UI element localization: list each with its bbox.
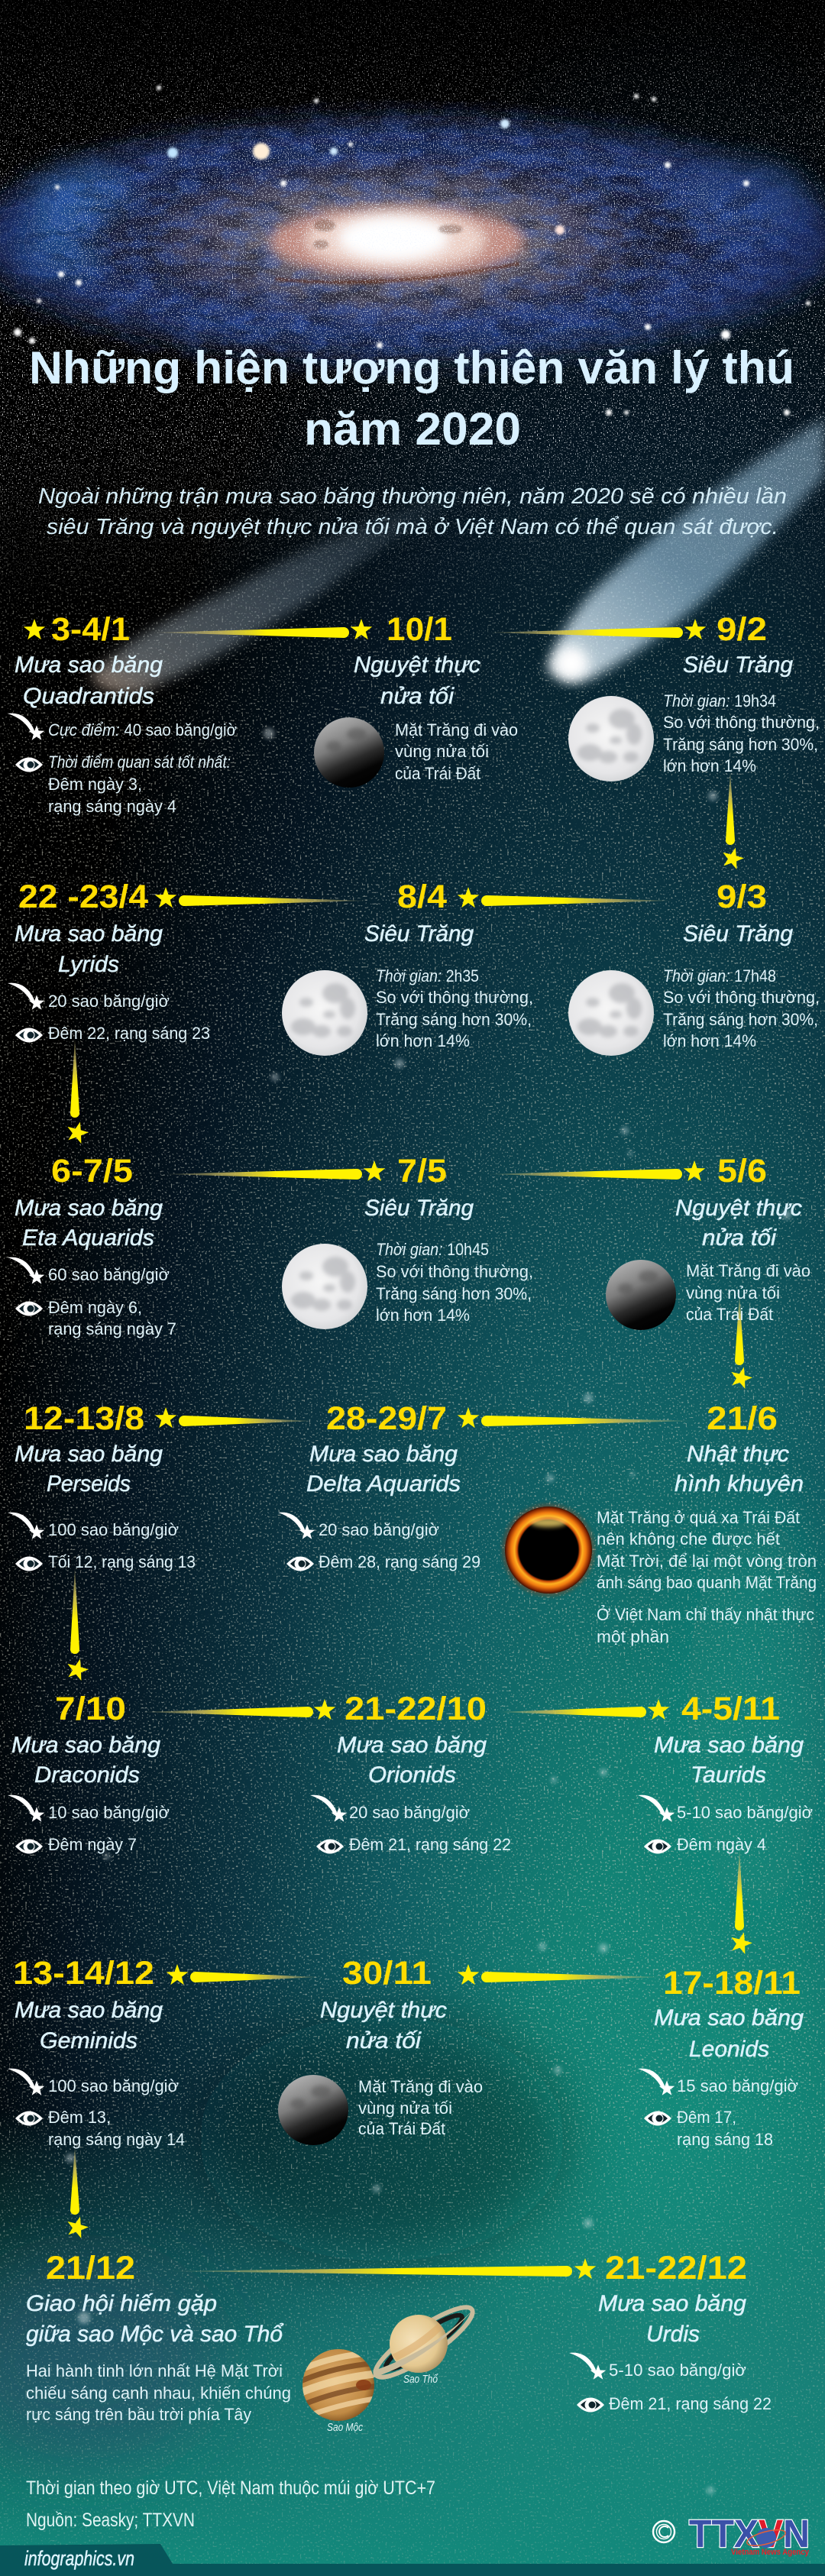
heading: [337, 1733, 487, 1788]
heading: Mưa sao băng: [11, 1733, 160, 1758]
viewing time: Đêm ngày 6,: [48, 1298, 142, 1317]
icon: eye: [15, 2112, 43, 2125]
description: [358, 2077, 483, 2138]
viewing time: Đêm 22, rạng sáng 23: [48, 1024, 210, 1043]
description: Mặt Trăng đi vào: [358, 2077, 483, 2096]
heading: nửa tối: [346, 2028, 422, 2053]
description: lớn hơn 14%: [376, 1306, 470, 1325]
heading: Leonids: [689, 2037, 769, 2062]
star icon: [458, 1407, 479, 1428]
description: Mặt Trăng ở quá xa Trái Đất: [597, 1508, 800, 1527]
heading: [11, 1733, 160, 1788]
background: sharp stars at top: [0, 0, 825, 611]
date: 21/6: [707, 1400, 778, 1437]
icon: full moon: [568, 696, 654, 782]
star icon: [155, 887, 176, 908]
heading: [654, 1733, 804, 1788]
heading: [15, 1998, 163, 2053]
heading: [306, 1442, 461, 1497]
connector arrow: 12-13/8 to 7/10: [70, 1568, 79, 1654]
icon: shooting star: [8, 983, 44, 1010]
description: Thời gian: 2h35: [376, 966, 479, 985]
panel: 21-22/12 Urdis: [569, 2250, 772, 2413]
description: [597, 1508, 817, 1646]
viewing time: rạng sáng ngày 14: [48, 2130, 185, 2149]
viewing time: Tối 12, rạng sáng 13: [48, 1552, 196, 1571]
date: 28-29/7: [326, 1400, 447, 1437]
icon: eye: [15, 1302, 43, 1316]
galaxy: [0, 76, 825, 416]
description: So với thông thường,: [376, 1262, 533, 1281]
description: của Trái Đất: [358, 2119, 445, 2138]
icon: dark moon: [278, 2075, 348, 2145]
date: 30/11: [342, 1955, 432, 1992]
heading: [15, 921, 163, 977]
star icon: [458, 1964, 479, 1985]
icon: eye: [644, 1840, 671, 1853]
heading: Siêu Trăng: [683, 921, 793, 947]
icon: eye: [15, 1840, 43, 1853]
date: 7/10: [55, 1691, 126, 1727]
rate: 20 sao băng/giờ: [319, 1520, 439, 1539]
heading: Siêu Trăng: [683, 652, 793, 678]
description: Trăng sáng hơn 30%,: [663, 735, 818, 754]
description: nên không che được hết: [597, 1529, 780, 1549]
date: 7/5: [397, 1153, 447, 1189]
icon: shooting star: [8, 1513, 44, 1539]
heading: nửa tối: [380, 684, 455, 709]
intro text: [38, 484, 787, 539]
panel: 21-22/10 Orionids: [310, 1691, 511, 1854]
panel: 6-7/5 Eta Aquarids: [8, 1119, 176, 1338]
description: [26, 2361, 291, 2424]
connector arrow: 21/12 to 21-22/12: [168, 2266, 572, 2277]
description: vùng nửa tối: [686, 1283, 780, 1303]
star icon: [684, 1160, 705, 1181]
description: So với thông thường,: [663, 988, 820, 1007]
icon: eye: [15, 758, 43, 772]
panel: 30/11 penumbral lunar eclipse: [278, 1955, 483, 2145]
connector arrow: 21/6 to 28-29/7: [481, 1416, 694, 1426]
star icon: [314, 1699, 335, 1720]
icon: eye: [577, 2397, 604, 2413]
heading: Urdis: [646, 2322, 700, 2347]
description: rực sáng trên bầu trời phía Tây: [26, 2405, 251, 2424]
panel: 13-14/12 Geminids: [8, 1955, 188, 2149]
connector arrow: 3-4/1 to 10/1: [153, 627, 349, 638]
title: [29, 342, 794, 455]
rate: 60 sao băng/giờ: [48, 1265, 170, 1284]
intro text: Ngoài những trận mưa sao băng thường niên, năm 2020 sẽ có nhiều lần: [38, 484, 787, 509]
viewing time: Đêm 21, rạng sáng 22: [609, 2394, 772, 2413]
icon: shooting star: [638, 1795, 675, 1822]
connector arrow: 17-18/11 to 30/11: [481, 1972, 663, 1982]
icon: shooting star: [8, 1795, 44, 1822]
heading: Mưa sao băng: [598, 2291, 746, 2316]
connector arrow: 13-14/12 to 21/12: [70, 2147, 79, 2215]
heading: giữa sao Mộc và sao Thổ: [26, 2322, 284, 2347]
viewing time: rạng sáng 18: [677, 2130, 773, 2149]
heading: [15, 652, 163, 709]
description: Hai hành tinh lớn nhất Hệ Mặt Trời: [26, 2361, 283, 2380]
panel: 17-18/11 Leonids: [638, 1930, 804, 2149]
description: Thời gian: 19h34: [663, 691, 776, 710]
panel: 5/6 penumbral lunar eclipse: [606, 1153, 810, 1330]
icon: Jupiter: [302, 2349, 374, 2421]
icon: eye: [316, 1840, 344, 1853]
star icon: [155, 1407, 176, 1428]
description: [686, 1261, 810, 1324]
panel: 9/3 supermoon: [568, 845, 820, 1056]
heading: Mưa sao băng: [337, 1733, 487, 1758]
footer url: infographics.vn: [24, 2547, 134, 2570]
heading: [654, 2005, 804, 2062]
panel: 21/12 Jupiter Saturn conjunction: [26, 2214, 480, 2434]
heading: Eta Aquarids: [22, 1225, 154, 1251]
icon: eye: [644, 2112, 671, 2125]
star icon: [574, 2258, 596, 2279]
star icon: [64, 1656, 91, 1681]
star icon: [458, 887, 479, 908]
description: Trăng sáng hơn 30%,: [663, 1010, 818, 1029]
date: 9/2: [717, 611, 767, 648]
connector arrow: 6-7/5 to 7/5: [163, 1169, 362, 1180]
source: Nguồn: Seasky; TTXVN: [26, 2510, 195, 2531]
star icon: [684, 619, 706, 639]
heading: Nguyệt thực: [320, 1998, 447, 2023]
connector arrow: 5/6 to 21/6: [735, 1294, 744, 1365]
heading: Nguyệt thực: [354, 652, 480, 678]
heading: [15, 1442, 163, 1497]
description: lớn hơn 14%: [376, 1031, 470, 1050]
description: chiếu sáng cạnh nhau, khiến chúng: [26, 2383, 291, 2403]
heading: [15, 1196, 163, 1251]
description: Mặt Trăng đi vào: [395, 720, 518, 739]
icon: full moon: [568, 970, 654, 1056]
heading: Giao hội hiếm gặp: [26, 2291, 217, 2316]
rate: 100 sao băng/giờ: [48, 2076, 179, 2095]
comet: background left: [90, 485, 477, 694]
heading: Quadrantids: [23, 684, 154, 709]
date: 3-4/1: [51, 611, 130, 648]
viewing time: Đêm ngày 7: [48, 1835, 137, 1854]
date: 12-13/8: [24, 1400, 144, 1437]
description: So với thông thường,: [376, 988, 533, 1007]
viewing time: Đêm ngày 4: [677, 1835, 766, 1854]
date: 13-14/12: [13, 1955, 154, 1992]
star icon: [64, 1119, 91, 1144]
panel: 3-4/1 Quadrantids: [8, 611, 237, 816]
soft background stars: [66, 728, 791, 2494]
label: Sao Thổ: Sao Thổ: [403, 2373, 438, 2386]
connector arrow: 21-22/10 to 4-5/11: [497, 1707, 646, 1717]
heading: Taurids: [691, 1762, 766, 1788]
description: [663, 966, 820, 1050]
viewing time: [677, 2108, 773, 2149]
connector arrow: 28-29/7 to 12-13/8: [179, 1416, 313, 1426]
heading: Mưa sao băng: [15, 1196, 163, 1221]
icon: shooting star: [278, 1513, 315, 1539]
best viewing time: [48, 752, 231, 816]
star icon: [728, 1364, 755, 1390]
viewing time: rạng sáng ngày 7: [48, 1319, 176, 1338]
heading: nửa tối: [702, 1225, 777, 1251]
panel: 22-23/4 Lyrids: [8, 879, 210, 1043]
heading: Orionids: [368, 1762, 456, 1788]
icon: eye: [15, 1028, 43, 1042]
title: Những hiện tượng thiên văn lý thú: [29, 342, 794, 393]
peak rate: Cực điểm: 40 sao băng/giờ: [48, 720, 237, 739]
heading: Delta Aquarids: [306, 1471, 461, 1497]
description: vùng nửa tối: [395, 742, 489, 761]
icon: shooting star: [310, 1795, 347, 1822]
connector arrow: 7/5 to 5/6: [487, 1169, 682, 1180]
heading: [26, 2291, 284, 2347]
description: của Trái Đất: [395, 764, 480, 783]
panel: 4-5/11 Taurids: [638, 1691, 813, 1854]
icon: shooting star: [8, 1257, 44, 1284]
comet: background right: [547, 418, 825, 681]
rate: 5-10 sao băng/giờ: [677, 1803, 813, 1822]
rate: 20 sao băng/giờ: [48, 992, 170, 1011]
panel: 28-29/7 Delta Aquarids: [278, 1400, 480, 1571]
date: 21-22/10: [345, 1691, 487, 1727]
heading: Lyrids: [58, 952, 119, 977]
best viewing time: Đêm ngày 3,: [48, 775, 142, 794]
date: 8/4: [397, 879, 447, 915]
viewing time: Đêm 28, rạng sáng 29: [319, 1552, 480, 1571]
description: Trăng sáng hơn 30%,: [376, 1010, 532, 1029]
panel: 7/5 supermoon: [282, 1153, 533, 1329]
description: [663, 691, 820, 775]
connector arrow: 7/10 to 21-22/10: [142, 1707, 313, 1717]
description: Thời gian: 10h45: [376, 1240, 489, 1259]
panel: 9/2 supermoon: [568, 611, 820, 782]
heading: Draconids: [34, 1762, 140, 1788]
description: So với thông thường,: [663, 713, 820, 732]
description: ánh sáng bao quanh Mặt Trăng: [597, 1573, 817, 1592]
heading: Mưa sao băng: [309, 1442, 458, 1467]
panel: 21/6 annular solar eclipse: [503, 1364, 817, 1646]
icon: dark moon: [606, 1260, 676, 1330]
description: Thời gian: 17h48: [663, 966, 776, 985]
icon: shooting star: [638, 2069, 675, 2095]
viewing time: [48, 2108, 185, 2149]
heading: Perseids: [47, 1471, 131, 1497]
star icon: [648, 1699, 669, 1720]
star icon: [351, 619, 372, 639]
panel: 7/10 Draconids: [8, 1656, 170, 1854]
date: 21-22/12: [605, 2250, 747, 2286]
description: của Trái Đất: [686, 1305, 773, 1324]
description: [376, 966, 533, 1050]
viewing time: [48, 1298, 176, 1338]
description: Ở Việt Nam chỉ thấy nhật thực: [597, 1605, 814, 1624]
logo: TTXVN: TTXVN: [689, 2512, 810, 2555]
icon: dark moon: [314, 717, 384, 788]
description: lớn hơn 14%: [663, 756, 756, 775]
icon: shooting star: [569, 2353, 606, 2380]
rate: 5-10 sao băng/giờ: [609, 2361, 746, 2380]
icon: full moon: [282, 970, 367, 1056]
viewing time: Đêm 17,: [677, 2108, 736, 2127]
rate: 20 sao băng/giờ: [349, 1803, 470, 1822]
date: 6-7/5: [51, 1153, 133, 1189]
description: vùng nửa tối: [358, 2099, 452, 2118]
description: Trăng sáng hơn 30%,: [376, 1284, 532, 1303]
logo: TTXVN: Vietnam News Agency: [731, 2548, 810, 2557]
heading: Mưa sao băng: [654, 2005, 804, 2031]
heading: [675, 1196, 802, 1251]
icon: Saturn: [368, 2297, 480, 2387]
icon: eye: [286, 1557, 314, 1571]
heading: Mưa sao băng: [15, 652, 163, 678]
date: 22 -23/4: [18, 879, 148, 915]
description: [376, 1240, 533, 1325]
connector arrow: 30/11 to 13-14/12: [190, 1972, 321, 1982]
heading: Mưa sao băng: [15, 1442, 163, 1467]
description: lớn hơn 14%: [663, 1031, 756, 1050]
heading: hình khuyên: [675, 1471, 804, 1497]
star icon: [728, 1930, 755, 1955]
heading: [320, 1998, 447, 2053]
date: 17-18/11: [663, 1965, 801, 2002]
heading: Siêu Trăng: [364, 921, 474, 947]
viewing time: Đêm 13,: [48, 2108, 111, 2127]
intro text: siêu Trăng và nguyệt thực nửa tối mà ở Việt Nam có thể quan sát được.: [47, 515, 778, 539]
heading: [354, 652, 480, 709]
rate: 100 sao băng/giờ: [48, 1520, 179, 1539]
heading: Mưa sao băng: [654, 1733, 804, 1758]
date: 9/3: [717, 879, 767, 915]
title: năm 2020: [304, 403, 521, 455]
label: Sao Mộc: Sao Mộc: [327, 2421, 363, 2434]
heading: Geminids: [40, 2028, 138, 2053]
description: Mặt Trăng đi vào: [686, 1261, 810, 1280]
heading: [675, 1442, 804, 1497]
rate: 10 sao băng/giờ: [48, 1803, 170, 1822]
panel: 8/4 supermoon: [282, 879, 533, 1056]
best viewing time: Thời điểm quan sát tốt nhất:: [48, 752, 231, 772]
heading: Siêu Trăng: [364, 1196, 474, 1221]
rate: 15 sao băng/giờ: [677, 2076, 798, 2095]
star icon: [24, 619, 45, 639]
star icon: [167, 1964, 188, 1985]
connector arrow: 9/2 to 9/3: [726, 772, 735, 845]
heading: Mưa sao băng: [15, 1998, 163, 2023]
star icon: [364, 1160, 385, 1181]
icon: full moon: [282, 1244, 367, 1329]
date: 21/12: [46, 2250, 135, 2286]
footnote: time zone: Thời gian theo giờ UTC, Việt Nam thuộc múi giờ UTC+7: [26, 2477, 435, 2499]
heading: Mưa sao băng: [15, 921, 163, 947]
heading: Nguyệt thực: [675, 1196, 802, 1221]
icon: eye: [15, 1557, 43, 1571]
connector arrow: 8/4 to 22-23/4: [179, 895, 368, 906]
icon: annular eclipse: [503, 1504, 594, 1596]
description: [395, 720, 518, 783]
star icon: [720, 845, 746, 870]
panel: 12-13/8 Perseids: [8, 1400, 196, 1571]
connector arrow: 4-5/11 to 17-18/11: [735, 1849, 744, 1930]
icon: shooting star: [8, 714, 44, 740]
date: 5/6: [717, 1153, 767, 1189]
best viewing time: rạng sáng ngày 4: [48, 797, 176, 816]
icon: shooting star: [8, 2069, 44, 2095]
date: 4-5/11: [681, 1691, 780, 1727]
connector arrow: 9/3 to 8/4: [481, 895, 674, 906]
description: một phần: [597, 1627, 669, 1646]
footer band: [0, 2544, 825, 2576]
connector arrow: 10/1 to 9/2: [487, 627, 683, 638]
date: 10/1: [387, 611, 452, 648]
heading: Nhật thực: [687, 1442, 789, 1467]
viewing time: Đêm 21, rạng sáng 22: [349, 1835, 511, 1854]
logo: copyright mark: [653, 2521, 675, 2542]
description: Mặt Trời, để lại một vòng tròn: [597, 1552, 817, 1571]
connector arrow: 22-23/4 to 6-7/5: [70, 1039, 79, 1118]
panel: 10/1 penumbral lunar eclipse: [314, 611, 518, 788]
star icon: [64, 2214, 91, 2239]
heading: [598, 2291, 746, 2347]
